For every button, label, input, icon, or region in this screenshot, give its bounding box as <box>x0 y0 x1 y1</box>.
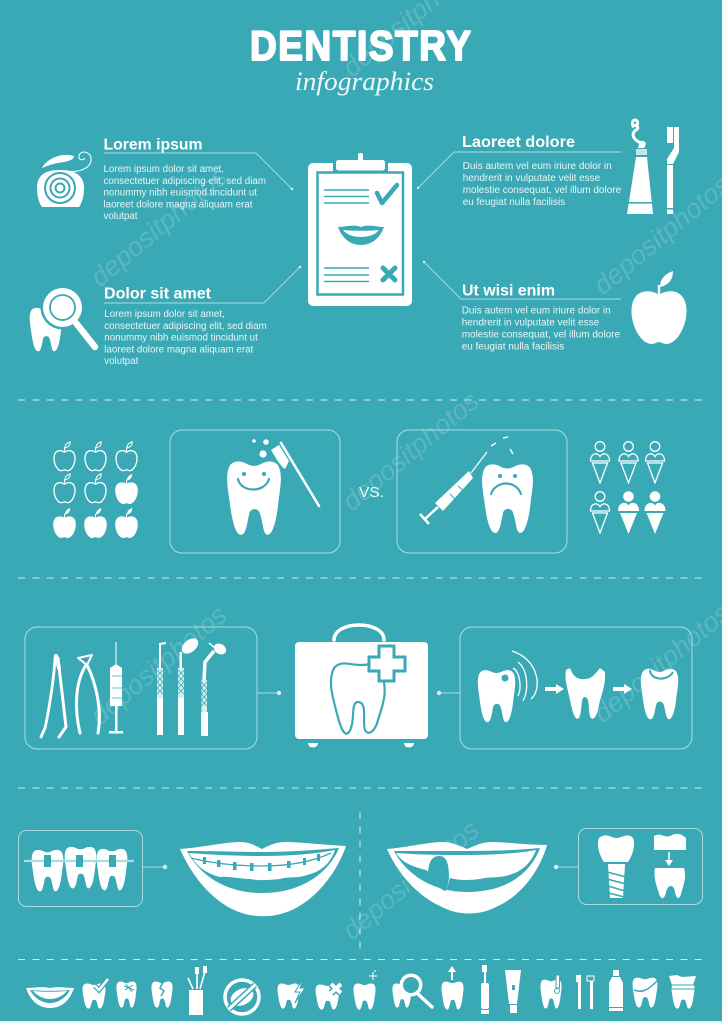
text block: Lorem ipsum: volutpat <box>104 211 138 222</box>
text block: Ut wisi enim: Duis autem vel eum iriure dolor in <box>462 306 611 317</box>
icon: tweezers <box>41 656 66 737</box>
icon: tooth with magnifier <box>30 286 95 351</box>
icon: vertical syringe <box>109 642 123 734</box>
icon: dental case <box>295 625 428 748</box>
icon: tooth decay <box>116 982 137 1008</box>
watermarks: depositphotos <box>337 815 485 946</box>
connector to implant <box>554 865 578 869</box>
text block: Lorem ipsum: consectetuer adipiscing elit, sed diam <box>104 176 266 187</box>
icon: cracked tooth <box>151 982 173 1008</box>
panel: dental instruments <box>25 627 257 749</box>
icon: no sweets <box>225 980 259 1014</box>
panel: braces teeth <box>18 830 142 906</box>
apples grid <box>53 442 138 538</box>
text block: Lorem ipsum: nonummy nibh euismod tincidunt ut <box>104 188 257 199</box>
panel: implant and crown <box>578 828 702 904</box>
bottom band <box>0 1021 722 1023</box>
icon: tooth with crown band <box>669 975 696 1009</box>
icon: tooth arrow up <box>441 966 464 1010</box>
watermarks: depositphotos <box>337 386 485 517</box>
text block: Ut wisi enim: hendrerit in vulputate velit esse <box>462 318 600 329</box>
text block: Ut wisi enim: molestie consequat, vel illum dolore <box>462 330 621 341</box>
text block: Dolor sit amet <box>104 286 267 367</box>
icon: tooth pain <box>277 978 305 1009</box>
icon row: bottom icons <box>26 965 696 1015</box>
icon: smile with missing tooth <box>387 842 547 914</box>
panel: tooth treatment steps <box>460 627 692 749</box>
icon: electric toothbrush <box>481 965 489 1014</box>
text block: Dolor sit amet: laoreet dolore magna aliquam erat <box>104 344 254 355</box>
icon: smile <box>26 987 74 1008</box>
icon: tooth cross <box>316 984 341 1010</box>
watermarks: depositphotos <box>85 600 233 731</box>
panel: sad tooth with syringe <box>397 430 567 553</box>
icon: floss <box>37 152 91 207</box>
text block: Lorem ipsum: Lorem ipsum <box>104 137 202 154</box>
text block: Laoreet dolore: Duis autem vel eum iriure dolor in <box>463 161 612 172</box>
text block: Laoreet dolore: hendrerit in vulputate velit esse <box>463 173 601 184</box>
vs label: VS. <box>359 484 384 501</box>
text block: Laoreet dolore: Laoreet dolore <box>462 134 575 151</box>
icon: small tools <box>576 975 594 1009</box>
icon: toothpaste and toothbrush <box>627 120 679 214</box>
watermarks: depositphotos <box>85 162 233 293</box>
icon: brush cup <box>188 966 207 1015</box>
dashed dividers <box>18 400 703 960</box>
icon: tooth check <box>82 979 108 1009</box>
subtitle: infographics <box>295 67 434 96</box>
icon: clipboard <box>308 153 412 306</box>
text block: Ut wisi enim <box>462 282 621 353</box>
text block: Ut wisi enim: eu feugiat nulla facilisis <box>462 342 564 353</box>
icon: tooth with plaque <box>633 978 659 1008</box>
ice creams grid <box>590 442 666 534</box>
text block: Laoreet dolore: molestie consequat, vel illum dolore <box>463 185 622 196</box>
text block: Ut wisi enim: Ut wisi enim <box>462 282 555 299</box>
text block: Laoreet dolore <box>462 134 622 208</box>
icon: forceps <box>76 655 99 733</box>
icon: apple <box>631 271 687 344</box>
icon: paste tube <box>505 970 521 1013</box>
title: DENTISTRY <box>250 23 471 70</box>
leader lines <box>104 152 621 303</box>
text block: Lorem ipsum <box>104 137 266 222</box>
icon: smile with braces <box>180 842 346 916</box>
text block: Laoreet dolore: eu feugiat nulla facilisis <box>463 197 565 208</box>
text block: Dolor sit amet: nonummy nibh euismod tincidunt ut <box>104 333 258 344</box>
text block: Lorem ipsum: laoreet dolore magna aliquam erat <box>104 199 253 210</box>
connector from braces <box>143 865 167 869</box>
panel: happy tooth with brush <box>170 430 340 553</box>
text block: Lorem ipsum: Lorem ipsum dolor sit amet, <box>104 164 224 175</box>
icon: spray bottle <box>609 970 623 1011</box>
icon: tooth alert <box>540 975 562 1009</box>
text block: Dolor sit amet: Lorem ipsum dolor sit amet, <box>104 309 225 320</box>
icon: sparkling tooth <box>353 970 377 1010</box>
text block: Dolor sit amet: Dolor sit amet <box>104 286 211 303</box>
icon: tooth magnifier <box>392 974 432 1008</box>
connector left of case <box>257 691 281 695</box>
text block: Dolor sit amet: volutpat <box>104 356 139 367</box>
icon: dental picks <box>157 635 228 736</box>
connector right of case <box>437 691 460 695</box>
text block: Dolor sit amet: consectetuer adipiscing elit, sed diam <box>104 321 267 332</box>
